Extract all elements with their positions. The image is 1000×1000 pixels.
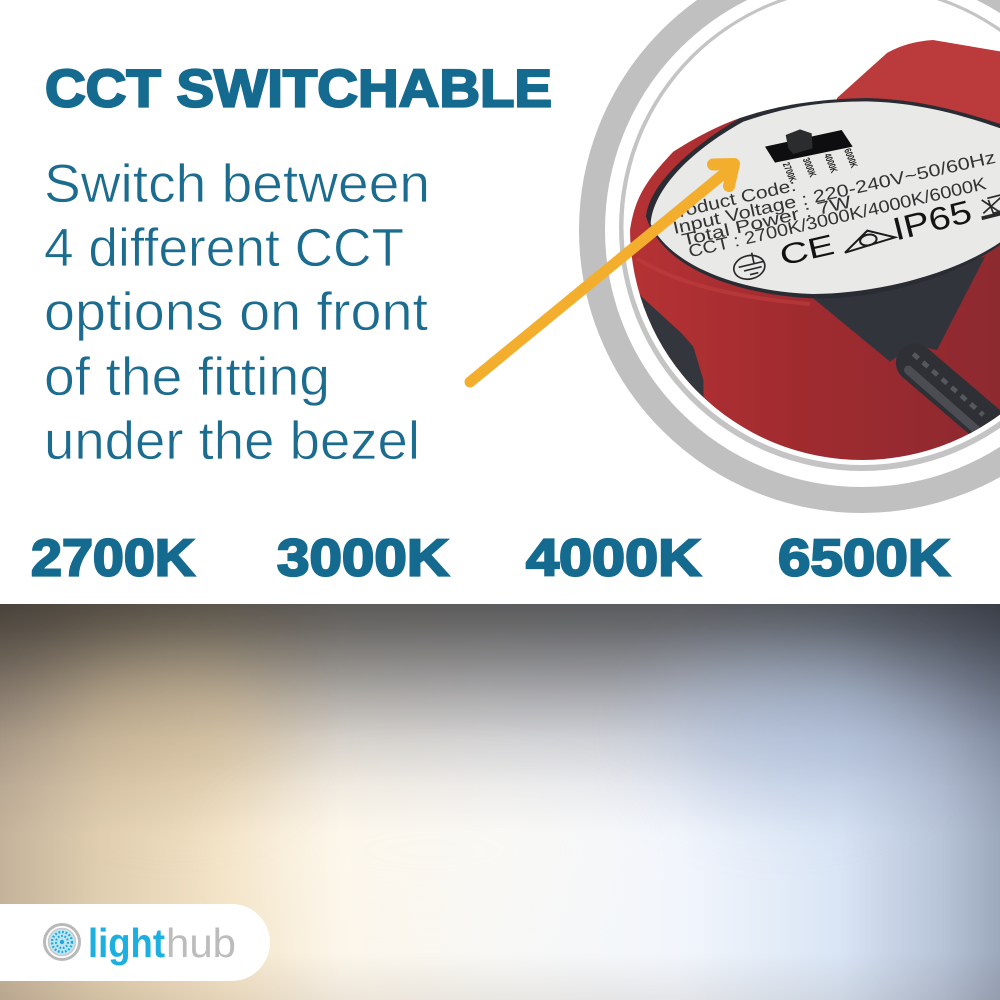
- red highlight band: [655, 267, 810, 306]
- logo wordmark second part: hub: [166, 920, 236, 966]
- colour temperature labels: 4000K: [526, 530, 702, 588]
- colour temperature labels: 2700K: [31, 530, 195, 588]
- circular frame rings: [592, 0, 1000, 500]
- switch position labels: 4000K: [821, 152, 839, 175]
- spec text on label: [674, 154, 996, 256]
- cable highlight: [908, 370, 977, 430]
- logo pill: [0, 904, 270, 981]
- rear red housing: [837, 40, 1000, 124]
- red cylinder body: [630, 118, 1000, 460]
- colour temperature labels: 6500K: [778, 530, 950, 588]
- title: CCT SWITCHABLE: [45, 60, 552, 118]
- switch position labels: 6000K: [841, 147, 859, 170]
- switch position labels: [782, 148, 858, 182]
- colour temperature labels: [31, 530, 950, 588]
- description text block: under the bezel: [44, 411, 420, 471]
- switch position labels: 3000K: [800, 156, 818, 179]
- white label: [651, 101, 1000, 294]
- logo icon: [44, 924, 80, 960]
- spec text on label: CCT : 2700K/3000K/4000K/6000K: [686, 173, 989, 261]
- colour temperature labels: 3000K: [277, 530, 449, 588]
- switch position labels: 2700K: [780, 161, 798, 184]
- description text block: [44, 154, 430, 471]
- dark gasket and label rim: [646, 98, 1000, 298]
- power cable: [915, 363, 1000, 447]
- arrow pointing to switch: [470, 164, 734, 382]
- spec text on label: Input Voltage : 220-240V~50/60Hz: [671, 147, 997, 238]
- description text block: options on front: [44, 282, 428, 342]
- triangle mark: [845, 231, 895, 253]
- spec text on label: Total Power : 7W: [680, 191, 854, 250]
- IP65 rating: IP65: [889, 193, 975, 247]
- selector slot: [765, 130, 853, 163]
- dark triangular cable gland: [813, 257, 985, 362]
- WEEE bin symbol: [982, 195, 1000, 218]
- black side bracket: [640, 294, 704, 398]
- selector knob: [786, 129, 813, 154]
- cable printing marks: [913, 354, 983, 415]
- description text block: 4 different CCT: [44, 218, 404, 278]
- description text block: of the fitting: [44, 347, 330, 407]
- spec text on label: roduct Code:: [676, 175, 798, 221]
- logo wordmark: light: [88, 920, 165, 966]
- background photo: colour temperature wall: [0, 604, 1000, 1000]
- earth symbol: [733, 252, 766, 280]
- CE mark: CE: [777, 229, 837, 272]
- product photo: driver with CCT switch: [630, 40, 1000, 460]
- description text block: Switch between: [44, 154, 430, 214]
